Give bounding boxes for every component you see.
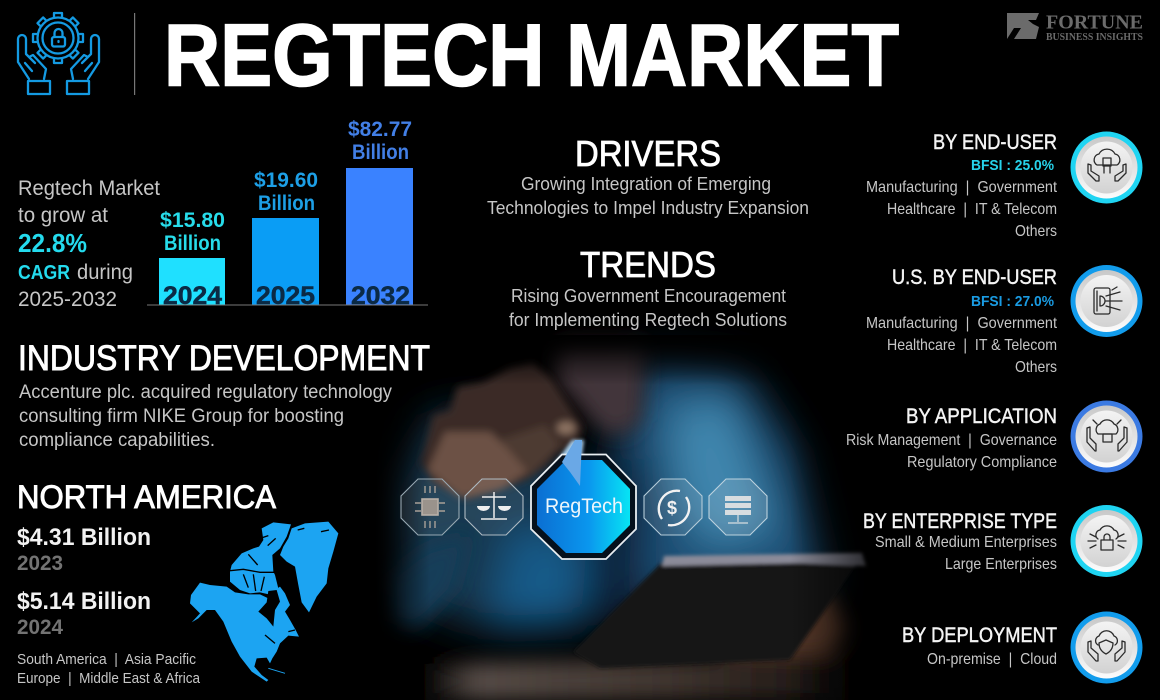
bar 2032: Billion bbox=[352, 141, 409, 164]
icon: dollar cycle octagon bbox=[644, 479, 702, 535]
trends bbox=[509, 244, 787, 330]
trends: Rising Government Encouragement bbox=[511, 286, 786, 306]
photo: person with tablet bbox=[300, 335, 930, 700]
text block: CAGR: 22.8% bbox=[18, 228, 87, 258]
north america: South America | Asia Pacific bbox=[17, 651, 196, 668]
icon: chip octagon bbox=[401, 479, 459, 535]
icon: dollar cycle octagon: $ bbox=[667, 498, 677, 518]
segment: by enterprise type: BY ENTERPRISE TYPE bbox=[863, 510, 1057, 533]
logo: Fortune Business Insights bbox=[1007, 12, 1143, 43]
segment: U.S. by end-user: Manufacturing | Government bbox=[866, 315, 1057, 332]
north america bbox=[17, 479, 277, 687]
segment: by application bbox=[846, 400, 1142, 472]
segment: by end-user: Healthcare | IT & Telecom bbox=[887, 201, 1057, 218]
icon: RegTech octagon: RegTech bbox=[545, 495, 623, 518]
segment: U.S. by end-user: Others bbox=[1015, 359, 1057, 376]
icon: cloud lock network bbox=[1070, 505, 1142, 577]
segment: by end-user: BFSI : 25.0% bbox=[971, 157, 1054, 174]
text block: CAGR: during bbox=[77, 261, 133, 284]
segment: by deployment: BY DEPLOYMENT bbox=[902, 624, 1057, 647]
bar 2024 bbox=[159, 209, 225, 310]
text block: CAGR: CAGR bbox=[18, 262, 70, 284]
segment: by end-user bbox=[866, 131, 1142, 240]
RegTech hexagon icons row bbox=[401, 440, 767, 559]
segment: by application: BY APPLICATION bbox=[906, 405, 1057, 428]
segment: by enterprise type: Large Enterprises bbox=[945, 556, 1057, 573]
segment: by end-user: Others bbox=[1015, 223, 1057, 240]
bar 2025: $19.60 bbox=[254, 169, 318, 192]
title: REGTECH MARKET bbox=[164, 6, 899, 104]
drivers: DRIVERS bbox=[575, 133, 721, 174]
bar 2024: $15.80 bbox=[160, 209, 225, 232]
segment: by deployment bbox=[902, 612, 1142, 684]
bar 2024: 2024 bbox=[163, 282, 222, 310]
north america: 2024 bbox=[17, 616, 63, 639]
map: North America bbox=[190, 522, 338, 682]
segment: by deployment: On-premise | Cloud bbox=[927, 651, 1057, 668]
north america: NORTH AMERICA bbox=[17, 479, 277, 515]
industry development: Accenture plc. acquired regulatory technology bbox=[19, 382, 392, 403]
industry development: consulting firm NIKE Group for boosting bbox=[19, 406, 344, 427]
segment: by application: Regulatory Compliance bbox=[907, 454, 1057, 471]
north america: Europe | Middle East & Africa bbox=[17, 670, 201, 687]
industry development: compliance capabilities. bbox=[19, 430, 215, 451]
industry development: INDUSTRY DEVELOPMENT bbox=[18, 339, 430, 378]
bar 2025 bbox=[252, 169, 319, 310]
bar 2032: 2032 bbox=[351, 282, 410, 310]
icon: server octagon bbox=[709, 479, 767, 535]
icon: scales octagon bbox=[465, 479, 523, 535]
segment: by end-user: Manufacturing | Government bbox=[866, 179, 1057, 196]
icon: cloud lock hands bbox=[1070, 400, 1142, 472]
north america: 2023 bbox=[17, 552, 63, 575]
segment: U.S. by end-user bbox=[866, 265, 1142, 376]
segment: U.S. by end-user: BFSI : 27.0% bbox=[971, 293, 1054, 310]
icon: RegTech octagon bbox=[531, 440, 636, 559]
north america: $5.14 Billion bbox=[17, 588, 151, 615]
segment: by end-user: BY END-USER bbox=[933, 131, 1057, 154]
icon: digital circuit bbox=[1070, 265, 1142, 337]
segment: by enterprise type: Small & Medium Enterprises bbox=[875, 534, 1057, 551]
bar 2024: Billion bbox=[164, 232, 221, 255]
trends: for Implementing Regtech Solutions bbox=[509, 310, 787, 330]
text block: CAGR: 2025-2032 bbox=[18, 288, 117, 311]
text block: CAGR: Regtech Market bbox=[18, 177, 160, 200]
segment: U.S. by end-user: U.S. BY END-USER bbox=[892, 266, 1057, 289]
segment: by enterprise type bbox=[863, 505, 1142, 577]
bar chart bbox=[147, 118, 428, 310]
text block: CAGR: to grow at bbox=[18, 204, 108, 227]
icon: gear lock in hands bbox=[18, 13, 99, 94]
logo: Fortune Business Insights: BUSINESS INSIGHTS bbox=[1046, 32, 1143, 43]
drivers: Technologies to Impel Industry Expansion bbox=[487, 198, 809, 218]
segment: U.S. by end-user: Healthcare | IT & Telecom bbox=[887, 337, 1057, 354]
segment: by application: Risk Management | Governance bbox=[846, 432, 1057, 449]
icon: cloud shield hands bbox=[1070, 612, 1142, 684]
drivers: Growing Integration of Emerging bbox=[521, 174, 771, 194]
bar 2025: 2025 bbox=[256, 282, 315, 310]
text block: CAGR bbox=[18, 177, 160, 311]
divider bbox=[134, 13, 135, 95]
drivers bbox=[487, 133, 809, 218]
bar 2032 bbox=[346, 118, 413, 310]
bar 2032: $82.77 bbox=[348, 118, 412, 141]
industry development bbox=[18, 339, 430, 451]
trends: TRENDS bbox=[580, 244, 716, 285]
icon: cloud robot hands bbox=[1070, 132, 1142, 204]
bar 2025: Billion bbox=[258, 192, 315, 215]
logo: Fortune Business Insights: FORTUNE bbox=[1046, 12, 1143, 34]
north america: $4.31 Billion bbox=[17, 524, 151, 551]
